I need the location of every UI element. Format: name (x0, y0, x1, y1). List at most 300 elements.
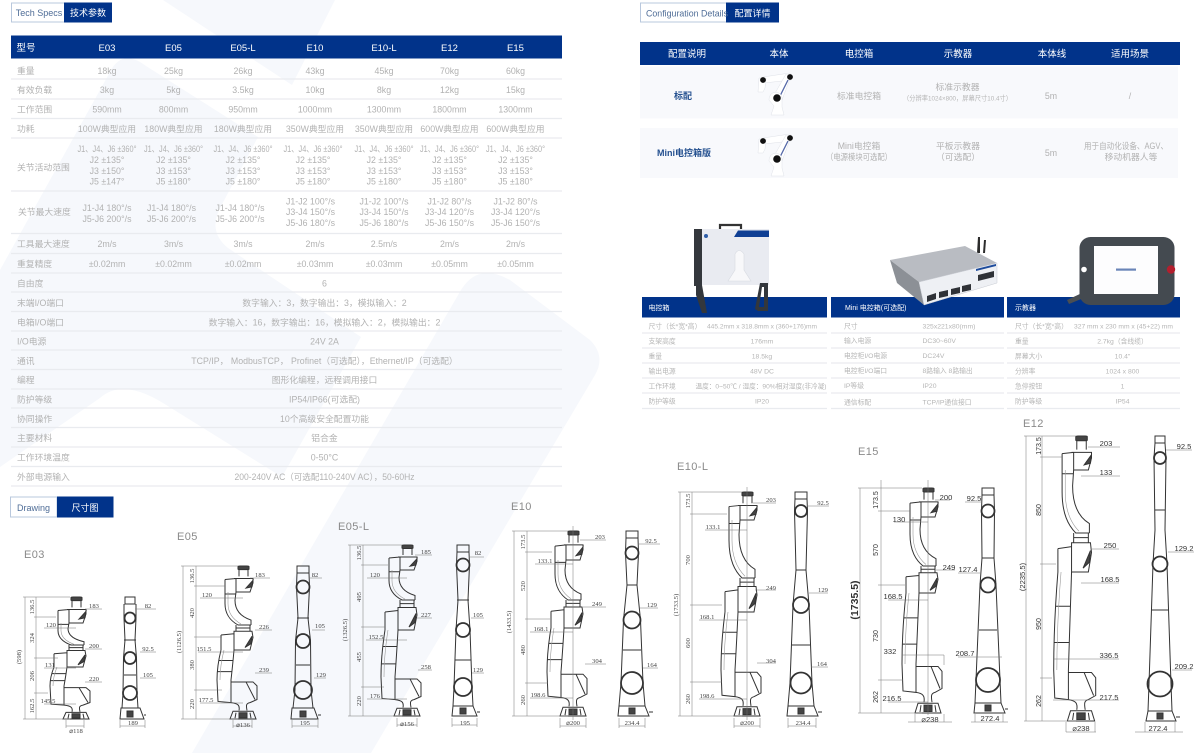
E05-L side view: 227 (421, 612, 432, 619)
E05 side view: (1126.5) (176, 631, 183, 653)
row: tool max speed: 2m/s (305, 239, 325, 249)
E10 side view: 198.6 (531, 692, 546, 699)
drawing: E05: 105 (315, 623, 326, 630)
rows: merged value rows: 主要材料 (17, 432, 52, 443)
row: joint max speed: J1-J2 80°/s (493, 196, 538, 206)
E12 side view: 950 (1036, 618, 1043, 630)
config header (640, 42, 1180, 65)
row: joint range: J2 ±135° (90, 155, 124, 165)
row: weight: 25kg (164, 66, 183, 76)
config row: standard: / (1129, 91, 1132, 101)
E10 side view: 304 (592, 658, 603, 665)
rows: merged value rows: 0-50°C (311, 452, 339, 462)
row: repeatability: ±0.02mm (225, 259, 261, 269)
tab: Tech Specs: 技术参数 (70, 7, 106, 18)
E03 side view: 145.5 (41, 698, 56, 705)
E05 side view: 380 (189, 659, 196, 670)
E15 side view: 216.5 (882, 694, 902, 703)
row: joint max speed (18, 196, 541, 228)
drawing: E10: 164 (647, 662, 658, 669)
panel: mini control box: 8路输入 8路输出 (922, 366, 973, 375)
panel: control box: 18.5kg (752, 354, 772, 360)
E03 side view: 183 (89, 603, 100, 610)
E10 front view (618, 531, 660, 728)
row: power: 600W典型应用 (486, 123, 545, 134)
E12 side view: (2235.5) (1018, 562, 1027, 591)
panel: mini control box: DC24V (922, 353, 945, 360)
E05-L side view: 220 (356, 695, 363, 706)
drawing: E10-L: 92.5 (817, 500, 829, 507)
E10-L front view (787, 492, 829, 728)
panel: teach pendant: 10.4" (1115, 354, 1131, 360)
table header row: E15 (507, 43, 524, 54)
panel: mini control box: Mini 电控箱(可选配) (845, 303, 906, 312)
rows: merged value rows: 防护等级 (17, 394, 52, 404)
E05-L side view: (1326.5) (342, 619, 349, 641)
panel: control box: 445.2mm x 318.8mm x (360+176)mm (707, 324, 817, 330)
row: repeatability: ±0.05mm (431, 259, 468, 269)
drawing: E10-L (673, 461, 829, 728)
drawing: E10-L: E10-L (677, 461, 708, 473)
row: tool max speed: 2m/s (97, 239, 117, 249)
rows: merged value rows: 数字输入：16，数字输出：16，模拟输入：2，模拟输出：2 (209, 316, 440, 328)
E15 front view (958, 488, 1008, 722)
row: tool max speed (17, 238, 526, 249)
panel: control box (642, 225, 827, 408)
row: joint range: J3 ±153° (226, 166, 260, 176)
E12 side view: 203 (1100, 439, 1112, 448)
illustration: mini control box (890, 237, 997, 305)
E05-L side view: 258 (421, 664, 432, 671)
panel: teach pendant: 327 mm x 230 mm x (45+22) mm (1074, 324, 1173, 330)
row: payload: 有效负载 (17, 84, 52, 95)
panel: mini control box: 通信标配 (844, 398, 871, 406)
panel: teach pendant: IP54 (1116, 398, 1130, 406)
rows: merged value rows (17, 278, 458, 482)
row: payload: 15kg (506, 85, 525, 95)
E15 side view: 168.5 (883, 592, 903, 601)
E15 side view: 570 (873, 544, 880, 556)
row: working range: 工作范围 (17, 104, 52, 114)
row: joint max speed: J5-J6 150°/s (491, 218, 541, 228)
row: joint range: J2 ±135° (226, 155, 260, 165)
rows: merged value rows: 6 (322, 278, 327, 288)
drawing: E05-L: E05-L (338, 521, 369, 533)
row: power: 600W典型应用 (420, 123, 479, 134)
E10 side view: 260 (520, 694, 527, 705)
row: tool max speed: 2.5m/s (371, 239, 398, 249)
row: joint range: J5 ±180° (226, 176, 260, 186)
row: joint range: J5 ±180° (296, 176, 330, 186)
config header: 电控箱 (845, 48, 873, 60)
tab: Drawing: 尺寸图 (71, 502, 99, 513)
rows: merged value rows: 协同操作 (17, 413, 52, 424)
row: joint range: J1、J4、J6 ±360° (144, 144, 203, 154)
rows: merged value rows: 编程 (17, 374, 35, 385)
row: joint range: J5 ±180° (498, 176, 533, 186)
drawing: E10: 129 (647, 602, 658, 609)
drawing: E15: 127.4 (958, 565, 978, 574)
row: power: 功耗 (17, 124, 35, 134)
config header: 本体 (769, 48, 789, 60)
table header row (11, 36, 562, 58)
E15 side view (849, 480, 955, 724)
row: payload: 3.5kg (232, 85, 254, 95)
row: weight: 45kg (374, 66, 394, 76)
tab: Drawing: Drawing (17, 503, 50, 513)
row: power: 350W典型应用 (355, 123, 413, 134)
row: working range: 1800mm (432, 104, 467, 114)
table header row: E05-L (230, 43, 256, 54)
E10-L side view: 249 (766, 585, 777, 592)
rows: merged value rows: IP54/IP66(可选配) (289, 394, 360, 404)
row: joint max speed: J1-J4 180°/s (147, 203, 197, 213)
row: joint range: J1、J4、J6 ±360° (214, 144, 272, 154)
row: weight: 26kg (233, 66, 253, 76)
E05 front view (291, 566, 326, 728)
panel: control box: 温度：0~50℃ / 湿度：90%相对湿度(非冷凝) (696, 382, 826, 390)
panel: mini control box: TCP/IP通信接口 (922, 398, 972, 406)
row: joint max speed: J3-J4 150°/s (360, 207, 409, 217)
row: joint max speed: J1-J4 180°/s (216, 203, 265, 213)
drawing: E05: 195 (300, 720, 311, 727)
rows: merged value rows: 工作环境温度 (17, 452, 70, 462)
E05 side view: ⌀136 (236, 722, 251, 729)
row: repeatability: 重复精度 (17, 258, 52, 269)
row: joint max speed: 关节最大速度 (18, 206, 71, 217)
rows: merged value rows: 自由度 (17, 278, 44, 288)
E15 side view: 173.5 (873, 491, 880, 509)
panel: control box: 重量 (648, 352, 662, 360)
E10 side view: 168.1 (534, 626, 548, 633)
drawing: E10: E10 (511, 501, 532, 513)
row: payload: 3kg (100, 85, 114, 95)
drawing: E12: 129.2 (1174, 544, 1194, 553)
rows: merged value rows: TCP/IP， ModbusTCP， Profinet（可选配），Ethernet/IP（可选配） (191, 355, 458, 366)
E05 side view: 183 (255, 572, 266, 579)
E05-L side view: 120 (370, 572, 381, 579)
row: joint range: J3 ±153° (367, 166, 401, 176)
row: joint range: J2 ±135° (432, 155, 467, 165)
table header row: E05 (165, 43, 182, 54)
drawing: E05-L (338, 521, 484, 728)
row: working range: 1300mm (367, 104, 401, 114)
E05 side view: 420 (189, 607, 196, 618)
panel: teach pendant: 急停按钮 (1015, 382, 1042, 390)
config row: mini (640, 128, 1178, 178)
row: payload: 5kg (166, 85, 181, 95)
row: working range (17, 104, 533, 114)
E03 front view (120, 597, 156, 728)
panel: control box: 尺寸（长*宽*高） (648, 322, 701, 330)
drawing: E05-L: 105 (473, 612, 484, 619)
row: working range: 590mm (92, 104, 122, 114)
drawing: E05: E05 (177, 531, 198, 543)
panel: mini control box: 电控柜I/O端口 (844, 366, 887, 375)
E12 side view: ⌀238 (1072, 724, 1090, 733)
row: joint max speed: J5-J6 180°/s (360, 218, 409, 228)
illustration: teach pendant (1067, 237, 1175, 305)
config row: standard (640, 66, 1178, 118)
drawing: E12: 272.4 (1148, 724, 1168, 733)
rows: merged value rows: I/O电源 (17, 336, 47, 346)
panel: control box: 电控箱 (648, 303, 670, 312)
E05 side view: 220 (189, 698, 196, 709)
rows: merged value rows: 数字输入：3，数字输出：3，模拟输入：2 (242, 297, 407, 308)
drawing: E03: 105 (143, 672, 154, 679)
row: working range: 1000mm (298, 104, 332, 114)
config row: standard: （分辨率1024×800，屏幕尺寸10.4寸） (903, 94, 1012, 102)
row: joint range: J3 ±153° (432, 166, 467, 176)
row: weight (17, 65, 525, 76)
E15 side view: 262 (873, 691, 880, 703)
drawing: E03: 189 (128, 720, 139, 727)
drawing: E10-L: 129 (818, 587, 829, 594)
E03 side view: 162.5 (29, 698, 36, 713)
E03 side view: 200 (89, 643, 100, 650)
row: joint range: J2 ±135° (367, 155, 401, 165)
E10 side view: 480 (520, 644, 527, 655)
config row: mini: （可选配） (936, 151, 980, 162)
table: technical specifications (11, 36, 562, 486)
panel: teach pendant (1007, 237, 1180, 408)
E05 side view: 136.5 (189, 568, 196, 583)
config header: 示教器 (944, 48, 973, 60)
E12 side view (1018, 436, 1120, 733)
drawing: E10 (506, 501, 660, 728)
config row: standard: 标配 (674, 90, 692, 101)
row: joint max speed: J3-J4 150°/s (286, 207, 336, 217)
panel: teach pendant: 防护等级 (1015, 396, 1042, 406)
E10 side view: 520 (520, 580, 527, 591)
row: joint range: J1、J4、J6 ±360° (486, 144, 545, 154)
drawing: E10: 92.5 (645, 538, 657, 545)
drawing: E12: 92.5 (1177, 442, 1191, 451)
row: payload: 12kg (440, 85, 459, 95)
row: joint range: 关节活动范围 (17, 162, 70, 172)
row: working range: 800mm (159, 104, 188, 114)
E05-L side view: 185 (421, 549, 432, 556)
E10 side view: 173.5 (520, 534, 527, 549)
panel: mini control box: 电控柜I/O电源 (844, 351, 887, 360)
row: tool max speed: 2m/s (440, 239, 460, 249)
row: joint max speed: J5-J6 200°/s (82, 214, 132, 224)
drawing: E15: 272.4 (980, 714, 1000, 723)
row: weight: 70kg (440, 66, 459, 76)
table header row: E10 (307, 43, 323, 54)
rows: merged value rows: 末端I/O端口 (17, 297, 64, 308)
E10 side view: (1433.5) (506, 611, 513, 633)
E03 side view: 136.5 (29, 599, 36, 614)
E15 side view: ⌀238 (921, 715, 939, 724)
E10-L side view: 700 (685, 554, 692, 565)
panel: control box: 输出电源 (648, 366, 676, 376)
row: joint range: J2 ±135° (498, 155, 533, 165)
drawing: E15 (849, 446, 1008, 724)
rows: merged value rows: 200-240V AC（可选配110-240V AC），50-60Hz (234, 471, 414, 482)
illustration: control box (694, 225, 769, 313)
config row: mini: （电源模块可选配） (826, 151, 892, 162)
drawing: E12 (1018, 418, 1194, 733)
panel: teach pendant: 尺寸（长*宽*高） (1015, 322, 1068, 330)
row: joint range: J2 ±135° (156, 155, 191, 165)
E05 side view: 177.5 (199, 697, 214, 704)
row: working range: 1300mm (498, 104, 533, 114)
E10-L side view: (1733.5) (673, 594, 680, 616)
row: payload (17, 84, 525, 95)
row: tool max speed: 工具最大速度 (17, 238, 70, 249)
row: power (17, 123, 545, 134)
icon: robot arm mini (758, 134, 793, 176)
drawing: E12: 209.2 (1174, 662, 1194, 671)
E10-L side view: 133.1 (706, 524, 720, 531)
rows: merged value rows: 外部电源输入 (17, 471, 70, 482)
row: joint max speed: J3-J4 120°/s (425, 207, 475, 217)
E10 side view: 133.1 (538, 558, 552, 565)
panel: control box: 工作环境 (648, 382, 676, 390)
row: joint range: J3 ±150° (90, 166, 124, 176)
drawing: E05-L: 195 (460, 720, 471, 727)
row: joint max speed: J3-J4 120°/s (491, 207, 541, 217)
config header: 配置说明 (668, 48, 706, 60)
E03 side view: (598) (16, 650, 23, 664)
icon: robot arm (758, 73, 793, 115)
table: configuration details (640, 42, 1180, 178)
E12 front view (1135, 436, 1194, 732)
E03 side view: 131 (45, 662, 55, 669)
E12 side view: 850 (1036, 504, 1043, 516)
rows: merged value rows: 图形化编程，远程调用接口 (272, 374, 377, 385)
row: repeatability: ±0.02mm (89, 259, 125, 269)
row: joint range: J2 ±135° (296, 155, 330, 165)
E05-L front view (452, 545, 484, 727)
E12 side view: 250 (1104, 541, 1116, 550)
drawing: E03: E03 (24, 549, 45, 561)
E03 side view (16, 597, 102, 735)
E05-L side view: 495 (356, 591, 363, 602)
config row: mini: 用于自动化设备、AGV、 (1084, 140, 1168, 151)
config row: mini: Mini电控箱版 (657, 147, 711, 158)
config header: 本体线 (1038, 48, 1067, 60)
drawing: E03: 82 (145, 603, 151, 610)
tab: Configuration Details: Configuration Details (646, 8, 729, 18)
E10-L side view: 198.6 (700, 693, 715, 700)
E05 side view: 151.5 (197, 646, 212, 653)
E12 side view: 217.5 (1099, 693, 1119, 702)
E10-L side view: 168.1 (700, 614, 714, 621)
config row: standard: 标准示教器 (936, 81, 980, 92)
tab: Configuration Details: 配置详情 (734, 8, 771, 18)
panel: control box: 防护等级 (648, 396, 676, 406)
drawing: E03 (16, 549, 156, 735)
drawing: E12: E12 (1023, 418, 1044, 430)
row: repeatability: ±0.03mm (297, 259, 333, 269)
drawing: E15: 92.5 (967, 494, 981, 503)
rows: merged value rows: 通讯 (17, 356, 35, 366)
E05-L side view: 455 (356, 651, 363, 662)
rows: merged value rows: 铝合金 (311, 432, 338, 443)
E05-L side view: 152.5 (369, 634, 384, 641)
E12 side view: 133 (1100, 468, 1112, 477)
panel: control box: 支架高度 (648, 336, 676, 346)
panel: mini control box (831, 237, 1004, 408)
panel: teach pendant: 1024 x 800 (1106, 368, 1140, 376)
drawing: E15: E15 (858, 446, 879, 458)
row: joint range: J5 ±180° (156, 176, 191, 186)
table header row: 型号 (16, 43, 36, 54)
E12 side view: 336.5 (1099, 651, 1119, 660)
row: joint max speed: J5-J6 200°/s (147, 214, 197, 224)
panel: control box: 176mm (751, 338, 774, 346)
row: weight: 60kg (506, 66, 525, 76)
E05 side view: 120 (202, 592, 213, 599)
E05-L side view: 136.5 (356, 545, 363, 560)
row: tool max speed: 2m/s (506, 239, 526, 249)
E12 side view: 173.5 (1036, 437, 1043, 455)
tab: Tech Specs: Tech Specs (16, 8, 63, 18)
E05-L side view: 176 (370, 693, 381, 700)
E10 side view (506, 526, 606, 728)
E10 side view: ⌀200 (566, 720, 581, 727)
E10-L side view: 203 (766, 497, 777, 504)
E10 side view: 203 (595, 534, 606, 541)
E15 side view: 200 (940, 493, 952, 502)
row: joint range: J1、J4、J6 ±360° (78, 144, 136, 154)
drawing: E10-L: 234.4 (796, 720, 811, 727)
row: joint range: J3 ±153° (296, 166, 330, 176)
config header: 适用场景 (1111, 49, 1149, 60)
E03 side view: 120 (46, 622, 57, 629)
row: repeatability: ±0.02mm (155, 259, 192, 269)
row: tool max speed: 3m/s (233, 239, 253, 249)
config row: mini: 移动机器人等 (1105, 151, 1158, 162)
table header row: E10-L (371, 43, 397, 54)
drawing: E10-L: 164 (817, 661, 828, 668)
row: weight: 43kg (305, 66, 325, 76)
E05-L side view (342, 545, 432, 728)
table header row: E03 (99, 43, 115, 54)
row: joint range: J5 ±180° (367, 176, 401, 186)
drawing: E05-L: 129 (473, 667, 484, 674)
row: joint max speed: J5-J6 150°/s (425, 218, 475, 228)
drawing: E15: 208.7 (955, 649, 975, 658)
tab: Configuration Details (640, 2, 779, 22)
drawing: E05: 82 (312, 572, 318, 579)
panel: mini control box: DC30~60V (922, 338, 956, 345)
config row: mini: 平板示教器 (936, 140, 980, 151)
row: weight: 18kg (97, 66, 117, 76)
row: joint range: J1、J4、J6 ±360° (354, 144, 414, 154)
row: joint max speed: J1-J2 100°/s (286, 196, 336, 206)
E15 side view: 730 (873, 630, 880, 642)
E10-L side view: 600 (685, 637, 692, 648)
row: joint max speed: J1-J2 80°/s (427, 196, 472, 206)
drawing: E05 (176, 531, 327, 729)
E15 side view: (1735.5) (849, 580, 861, 620)
E05 side view (176, 566, 272, 729)
E10 side view: 249 (592, 601, 603, 608)
E10-L side view: 304 (766, 658, 777, 665)
E10-L side view: ⌀200 (740, 720, 755, 727)
row: joint max speed: J5-J6 180°/s (286, 218, 336, 228)
config row: mini: 5m (1045, 148, 1057, 158)
panel: mini control box: IP等级 (844, 381, 864, 390)
row: joint range: J1、J4、J6 ±360° (284, 144, 342, 154)
row: joint range: J5 ±147° (90, 176, 124, 186)
panel: teach pendant: 分辨率 (1015, 366, 1036, 376)
panel: teach pendant: 重量 (1015, 338, 1029, 346)
rows: merged value rows: 电箱I/O端口 (17, 316, 64, 328)
